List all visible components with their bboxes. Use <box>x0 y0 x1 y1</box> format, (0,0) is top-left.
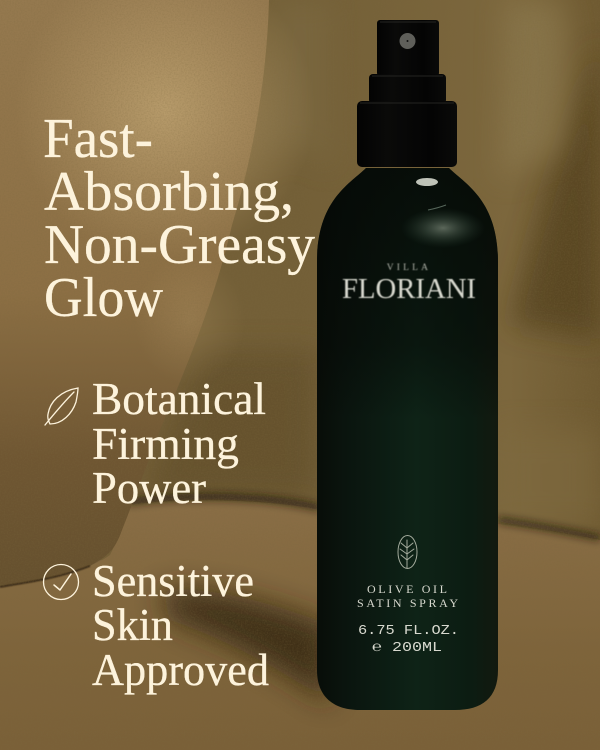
bottle shadow on floor <box>160 589 330 705</box>
bottle shoulder highlight <box>401 208 485 248</box>
brand label: FLORIANI <box>342 274 476 305</box>
text: botanical firming power: Botanical <box>92 374 266 424</box>
product name: SATIN SPRAY <box>357 596 458 610</box>
headline: Absorbing, <box>44 161 294 223</box>
feature: botanical firming power <box>45 374 266 513</box>
volume: ℮ 200ML <box>372 640 442 656</box>
background: draped cloth <box>0 0 315 587</box>
text: botanical firming power: Firming <box>92 419 239 469</box>
background: sand floor <box>0 497 600 750</box>
background: fabric wall <box>0 0 600 560</box>
nozzle <box>400 33 416 49</box>
brand label: VILLA <box>387 263 431 273</box>
product name <box>357 582 458 610</box>
icon: leaf emblem <box>398 536 417 568</box>
headline: Non-Greasy <box>44 214 315 276</box>
text: botanical firming power <box>92 374 266 513</box>
text: sensitive skin approved: Skin <box>92 600 173 650</box>
volume <box>358 623 459 656</box>
product name: OLIVE OIL <box>367 582 447 596</box>
bottle body <box>317 168 498 710</box>
neck reflection <box>416 178 438 186</box>
text: sensitive skin approved <box>92 556 269 695</box>
text: botanical firming power: Power <box>92 463 206 513</box>
icon: check circle <box>44 564 78 600</box>
spray cap <box>357 20 457 167</box>
headline: Glow <box>44 267 164 329</box>
headline <box>43 108 315 329</box>
product: spray bottle <box>317 20 498 710</box>
shoulder arc reflection <box>428 205 446 210</box>
bottle upper shading <box>317 168 498 420</box>
feature: sensitive skin approved <box>44 556 269 695</box>
headline: Fast- <box>43 108 153 170</box>
text: sensitive skin approved: Approved <box>92 645 269 695</box>
volume: 6.75 FL.OZ. <box>358 623 459 639</box>
icon: leaf <box>45 388 78 425</box>
text: sensitive skin approved: Sensitive <box>92 556 254 606</box>
